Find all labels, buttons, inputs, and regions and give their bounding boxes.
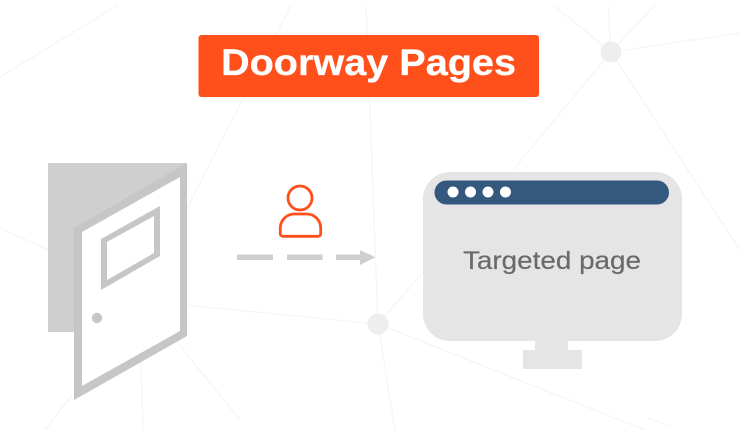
door leaf: [74, 163, 187, 400]
title badge: [198, 35, 539, 97]
icon: monitor: [423, 172, 682, 369]
browser bar: [434, 180, 669, 204]
monitor screen: [423, 172, 682, 341]
door knob: [92, 313, 102, 323]
monitor stand: [523, 335, 582, 369]
browser dots: [448, 186, 511, 198]
door frame back: [48, 163, 187, 332]
door window: [101, 206, 160, 290]
icon: user: [280, 186, 321, 236]
label: targeted page: Targeted page: [463, 247, 641, 275]
icon: open door: [48, 163, 187, 400]
arrow: door to targeted page: [237, 250, 376, 265]
title text: Doorway Pages: [221, 42, 516, 83]
